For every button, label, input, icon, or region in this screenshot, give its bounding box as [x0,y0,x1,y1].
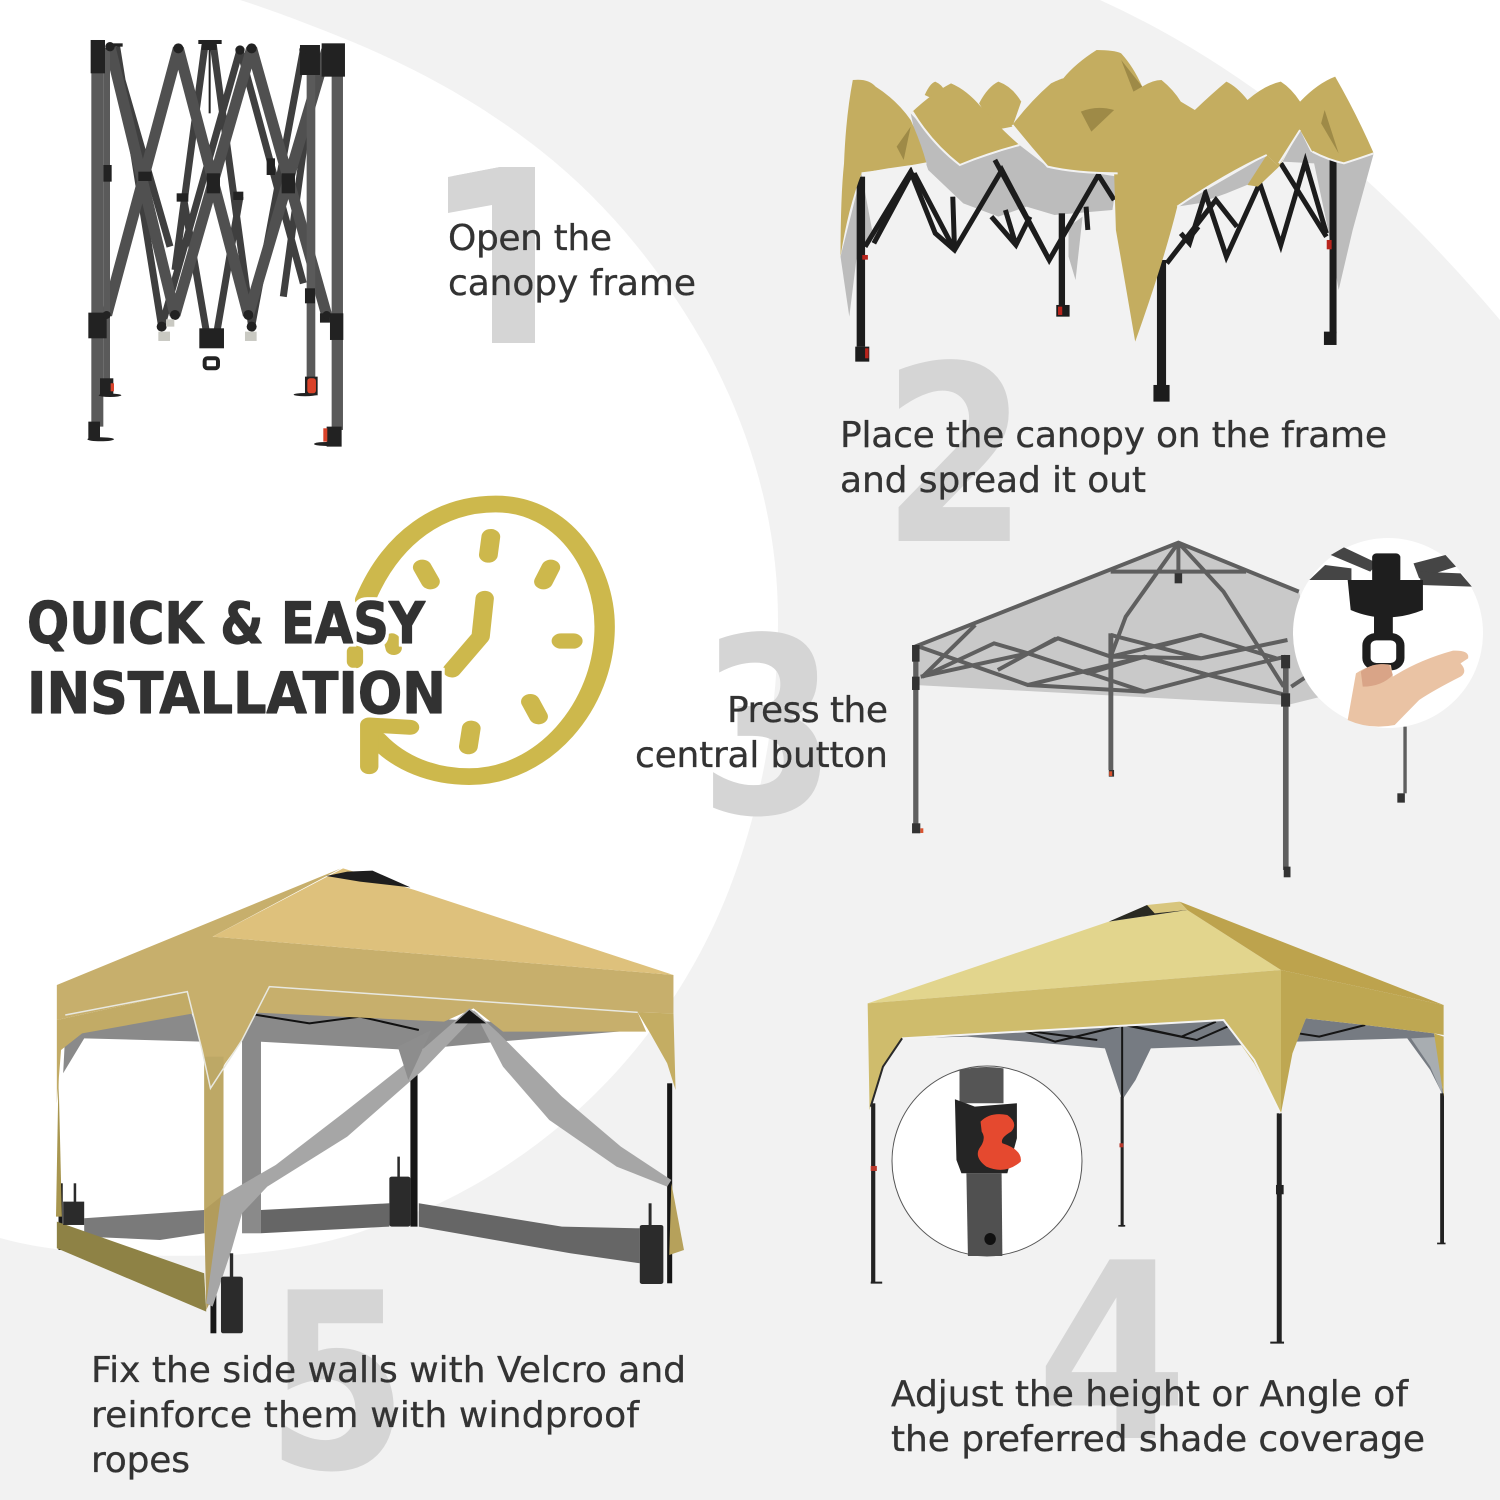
poles [59,1057,672,1333]
lock housing [955,1099,1017,1173]
caption step 3: Press the [727,690,888,731]
swivel ring [1366,637,1400,667]
legs [855,160,1337,402]
feet [912,573,1405,877]
step 4 image: finished canopy [868,902,1446,1344]
caption step 5: Fix the side walls with Velcro and [91,1350,686,1391]
step number 2: 2 [882,314,1028,599]
caption step 1: Open the [448,218,612,259]
caption step 4: Adjust the height or Angle of [891,1374,1409,1415]
caption step 5: reinforce them with windproof [91,1395,640,1436]
hub body [1348,553,1423,635]
grey underside band [63,1010,638,1233]
caption step 2: Place the canopy on the frame [840,415,1387,456]
front tan post [204,1057,224,1233]
caption step 2: and spread it out [840,460,1146,501]
center ring [205,358,218,368]
detail inset: central button hub and hand [1293,538,1483,728]
hand [1348,651,1468,727]
step number 3: 3 [700,586,836,871]
roof vent [1109,905,1187,922]
grey canopy lining [841,113,1374,317]
front valance [868,970,1283,1113]
white canopy edge [862,112,1374,207]
pole [960,1067,1004,1103]
caption step 4: the preferred shade coverage [891,1419,1425,1460]
roof front [868,910,1281,1003]
roof left [57,868,673,1088]
roof vent [326,871,410,887]
valance lower band [250,987,646,1032]
valance white edge [65,987,638,1088]
caption step 3: central button [635,735,888,776]
grey frame [915,543,1306,695]
red knob [978,1114,1021,1170]
heading line 1: QUICK & EASY [27,591,426,657]
roof right [1180,902,1444,1005]
detail inset: height adjustment lock [892,1066,1082,1256]
canopy shading folds [897,60,1339,160]
heading line 2: INSTALLATION [27,661,446,727]
caption step 1: canopy frame [448,263,696,304]
weight bags [63,1157,663,1333]
corner tabs [638,1012,676,1090]
canopy underside [902,1018,1444,1100]
mesh bottom walls [84,1203,640,1263]
title [27,504,605,777]
khaki canopy [841,50,1374,342]
red adjusters [871,1143,1123,1171]
adjustment hole [984,1233,996,1245]
right valance [1281,970,1444,1113]
mesh flaps [206,1008,671,1307]
black frame [865,160,1326,263]
khaki front wall panel [57,1222,206,1312]
step 5 image: canopy with mesh side walls [56,868,684,1333]
rafters [246,1013,419,1030]
poles [871,1093,1446,1344]
red clips [862,240,1332,358]
corner slider clips [158,319,257,341]
red locks [111,378,327,442]
step number 1: 1 [425,116,595,401]
roof front panel [213,868,673,975]
frame joints and feet [87,40,345,447]
valance white edge and left dark edge [902,1020,1280,1113]
step 1 image: open canopy frame [87,40,345,447]
clock icon [355,504,605,777]
frame rafters under canopy [967,1022,1365,1103]
step 3 image: frame with grey canopy [912,543,1407,877]
frame posts [91,43,343,430]
caption step 5: ropes [91,1440,190,1481]
right tan bundle [669,1183,684,1255]
step number 4: 4 [1036,1211,1188,1496]
step 2 image: canopy draped on frame [841,50,1374,402]
grey poles [913,633,1407,870]
grey canopy underside [915,543,1321,705]
hub arms [1309,547,1472,587]
